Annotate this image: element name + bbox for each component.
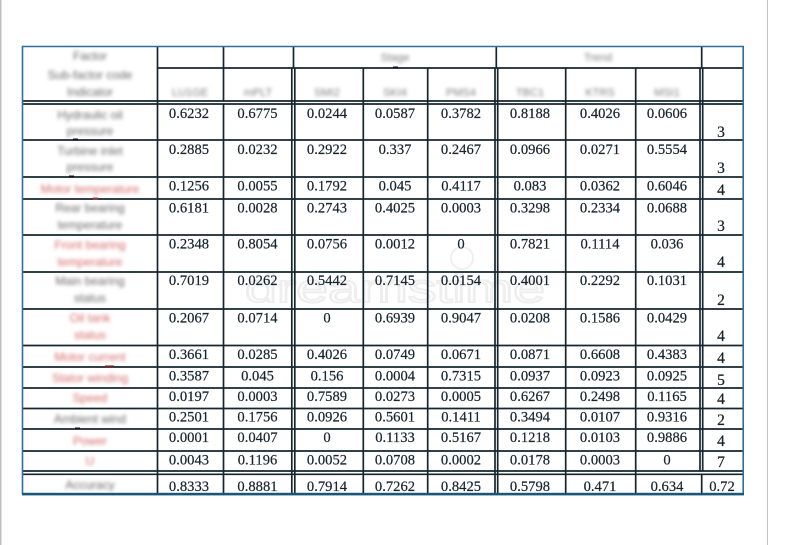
- rightmost count column: 4: [717, 433, 725, 450]
- table grid: [22, 46, 744, 495]
- data values: 0.2498: [580, 389, 620, 405]
- rightmost count column: 0.72: [709, 479, 735, 495]
- data values: 0.0178: [510, 452, 550, 468]
- data values: 0.0606: [647, 106, 687, 122]
- column headers: mPLT: [244, 87, 273, 99]
- rightmost count column: 2: [717, 412, 725, 429]
- data values: 0.1031: [647, 273, 687, 289]
- data values: 0.0055: [237, 179, 278, 195]
- rightmost count column: 4: [717, 182, 725, 199]
- data values: 0.0001: [169, 430, 209, 446]
- data values: 0.2922: [307, 142, 347, 158]
- rightmost count column: 4: [717, 328, 725, 345]
- row labels: Oil tank: [70, 311, 111, 325]
- data values: 0.5442: [307, 273, 347, 289]
- data values: 0.1411: [441, 410, 481, 426]
- data values: 0.0197: [169, 389, 209, 405]
- data values: 0.9047: [441, 311, 481, 327]
- watermark: [245, 247, 545, 311]
- data values: 0.4117: [441, 179, 481, 195]
- data values: 0.9886: [647, 430, 687, 446]
- data values: 0.0362: [580, 179, 620, 195]
- data values: 0.1586: [580, 311, 620, 327]
- rightmost count column: 4: [717, 350, 725, 367]
- data values: 0.8425: [441, 479, 481, 495]
- column headers: PMS4: [446, 87, 476, 99]
- data values: 0.2348: [169, 236, 209, 252]
- rightmost count column: 3: [717, 124, 725, 141]
- data values: 0.2743: [307, 201, 347, 217]
- column headers: [48, 49, 680, 99]
- data values: 0.634: [651, 479, 684, 495]
- data values: 0.1133: [375, 430, 415, 446]
- data values: 0.0688: [647, 201, 687, 217]
- data values: 0.0003: [580, 452, 620, 468]
- data values: 0.0208: [510, 311, 550, 327]
- row labels: temperature: [58, 255, 123, 269]
- data values: 0.0052: [307, 452, 347, 468]
- data values: 0.0004: [375, 369, 416, 385]
- rightmost count column: 2: [717, 292, 725, 309]
- data values: 0.7019: [169, 273, 209, 289]
- data values: 0.0005: [441, 389, 481, 405]
- row labels: Hydraulic oil: [57, 108, 123, 122]
- row labels: pressure: [67, 160, 114, 174]
- column headers: KTRS: [585, 87, 615, 99]
- data values: 0.4001: [510, 273, 550, 289]
- data values: 0.0244: [307, 106, 348, 122]
- data values: 0.0407: [237, 430, 278, 446]
- row labels: Turbine inlet: [57, 144, 123, 158]
- data values: 0.0708: [375, 452, 415, 468]
- data values: 0.7914: [307, 479, 348, 495]
- data values: 0.0107: [580, 410, 620, 426]
- data values: 0.2501: [169, 410, 209, 426]
- data values: 0.0003: [441, 201, 481, 217]
- data values: 0.1218: [510, 430, 550, 446]
- data values: 0.2067: [169, 311, 209, 327]
- data values: 0.045: [379, 179, 411, 195]
- data values: 0.8333: [169, 479, 209, 495]
- data values: 0: [323, 311, 331, 327]
- data values: 0.5167: [441, 430, 481, 446]
- data values: 0.0232: [237, 142, 278, 158]
- row labels: status: [74, 291, 106, 305]
- data values: 0.4026: [580, 106, 620, 122]
- row labels: Power: [73, 434, 107, 448]
- data values: 0.3494: [510, 410, 551, 426]
- row labels: status: [74, 328, 106, 342]
- data values: 0.2334: [580, 201, 621, 217]
- data values: 0.3298: [510, 201, 550, 217]
- data values: 0.0671: [441, 347, 481, 363]
- data values: 0.471: [584, 479, 616, 495]
- data values: 0.8054: [237, 236, 278, 252]
- artifact marks: [69, 66, 398, 429]
- data values: 0.0926: [307, 410, 347, 426]
- rightmost count column: [709, 124, 735, 495]
- column headers: Factor: [73, 49, 107, 63]
- data values: 0.0966: [510, 142, 550, 158]
- data values: 0.0925: [647, 369, 687, 385]
- data values: 0.1196: [238, 452, 277, 468]
- rightmost count column: 7: [717, 454, 725, 471]
- rightmost count column: 3: [717, 160, 725, 177]
- column headers: MSI1: [654, 87, 680, 99]
- data values: 0.3782: [441, 106, 481, 122]
- row labels: Stator winding: [52, 371, 128, 385]
- column headers: Stage: [381, 52, 409, 64]
- column headers: Trend: [584, 52, 612, 64]
- data values: 0.0271: [580, 142, 620, 158]
- row labels: Speed: [73, 391, 107, 405]
- data values: 0.5601: [375, 410, 415, 426]
- data values: 0.0756: [307, 236, 347, 252]
- row labels: temperature: [58, 218, 123, 232]
- data values: 0.6775: [237, 106, 278, 122]
- data values: 0.0749: [375, 347, 415, 363]
- data values: 0.1256: [169, 179, 209, 195]
- column headers: TBC1: [516, 87, 544, 99]
- data values: 0.0103: [580, 430, 620, 446]
- data values: 0.6232: [169, 106, 209, 122]
- data values: 0.0285: [237, 347, 278, 363]
- data values: 0.0587: [375, 106, 415, 122]
- data values: 0.0273: [375, 389, 415, 405]
- data values: 0.0012: [375, 236, 415, 252]
- data values: 0.0154: [441, 273, 482, 289]
- data values: 0.0002: [441, 452, 481, 468]
- data values: 0.1114: [580, 236, 620, 252]
- data values: 0.2467: [441, 142, 481, 158]
- watermark: dreamstime: [245, 267, 545, 311]
- data values: 0.8188: [510, 106, 550, 122]
- column headers: SKI4: [383, 87, 407, 99]
- data values: 0.156: [311, 369, 343, 385]
- row labels: pressure: [67, 124, 114, 138]
- rightmost count column: 4: [717, 391, 725, 408]
- data values: 0.6608: [580, 347, 620, 363]
- data values: 0.0714: [237, 311, 278, 327]
- row labels: Ambient wind: [54, 412, 126, 426]
- column headers: Indicator: [67, 85, 113, 99]
- data values: 0.7589: [307, 389, 347, 405]
- data values: 0: [323, 430, 331, 446]
- data values: 0.083: [514, 179, 546, 195]
- data values: 0.0937: [510, 369, 550, 385]
- row labels: Front bearing: [54, 238, 126, 252]
- data values: 0.6267: [510, 389, 550, 405]
- data values: 0.6939: [375, 311, 415, 327]
- data values: 0.0003: [237, 389, 278, 405]
- column headers: SMI2: [314, 87, 340, 99]
- data values: 0.0028: [237, 201, 278, 217]
- rightmost count column: 5: [717, 372, 725, 389]
- data values: 0.7821: [510, 236, 550, 252]
- row labels: Motor temperature: [41, 182, 140, 196]
- data values: 0.5798: [510, 479, 550, 495]
- data values: 0.2885: [169, 142, 209, 158]
- data values: 0.8881: [237, 479, 278, 495]
- data values: 0.3661: [169, 347, 209, 363]
- column headers: LU1GE: [172, 87, 208, 99]
- data values: 0.337: [379, 142, 411, 158]
- data values: 0.4026: [307, 347, 347, 363]
- row labels: Motor current: [54, 350, 126, 364]
- row labels: Accuracy: [65, 478, 115, 492]
- data values: 0.0429: [647, 311, 687, 327]
- data values: 0.7145: [375, 273, 415, 289]
- data values: 0.4383: [647, 347, 687, 363]
- data values: 0.3587: [169, 369, 209, 385]
- data values: 0.0923: [580, 369, 620, 385]
- data values: 0: [663, 452, 671, 468]
- data values: 0.045: [241, 369, 274, 385]
- data values: [169, 106, 688, 495]
- data values: 0.9316: [647, 410, 687, 426]
- data values: 0.7262: [375, 479, 415, 495]
- data values: 0.5554: [647, 142, 688, 158]
- data values: 0.036: [651, 236, 683, 252]
- rightmost count column: 3: [717, 218, 725, 235]
- data values: 0.1792: [307, 179, 347, 195]
- data values: 0.7315: [441, 369, 481, 385]
- data values: 0.6046: [647, 179, 687, 195]
- rightmost count column: 4: [717, 254, 725, 271]
- data values: 0.0871: [510, 347, 550, 363]
- row labels: U: [86, 454, 94, 468]
- data values: 0: [457, 236, 465, 252]
- column headers: Sub-factor code: [48, 68, 133, 82]
- data values: 0.1165: [647, 389, 687, 405]
- data values: 0.0043: [169, 452, 209, 468]
- data values: 0.1756: [237, 410, 278, 426]
- row labels: Main bearing: [55, 274, 125, 288]
- data values: 0.2292: [580, 273, 620, 289]
- row labels: [41, 108, 140, 492]
- data values: 0.0262: [237, 273, 278, 289]
- data values: 0.4025: [375, 201, 415, 217]
- data values: 0.6181: [169, 201, 209, 217]
- row labels: Rear bearing: [55, 201, 125, 215]
